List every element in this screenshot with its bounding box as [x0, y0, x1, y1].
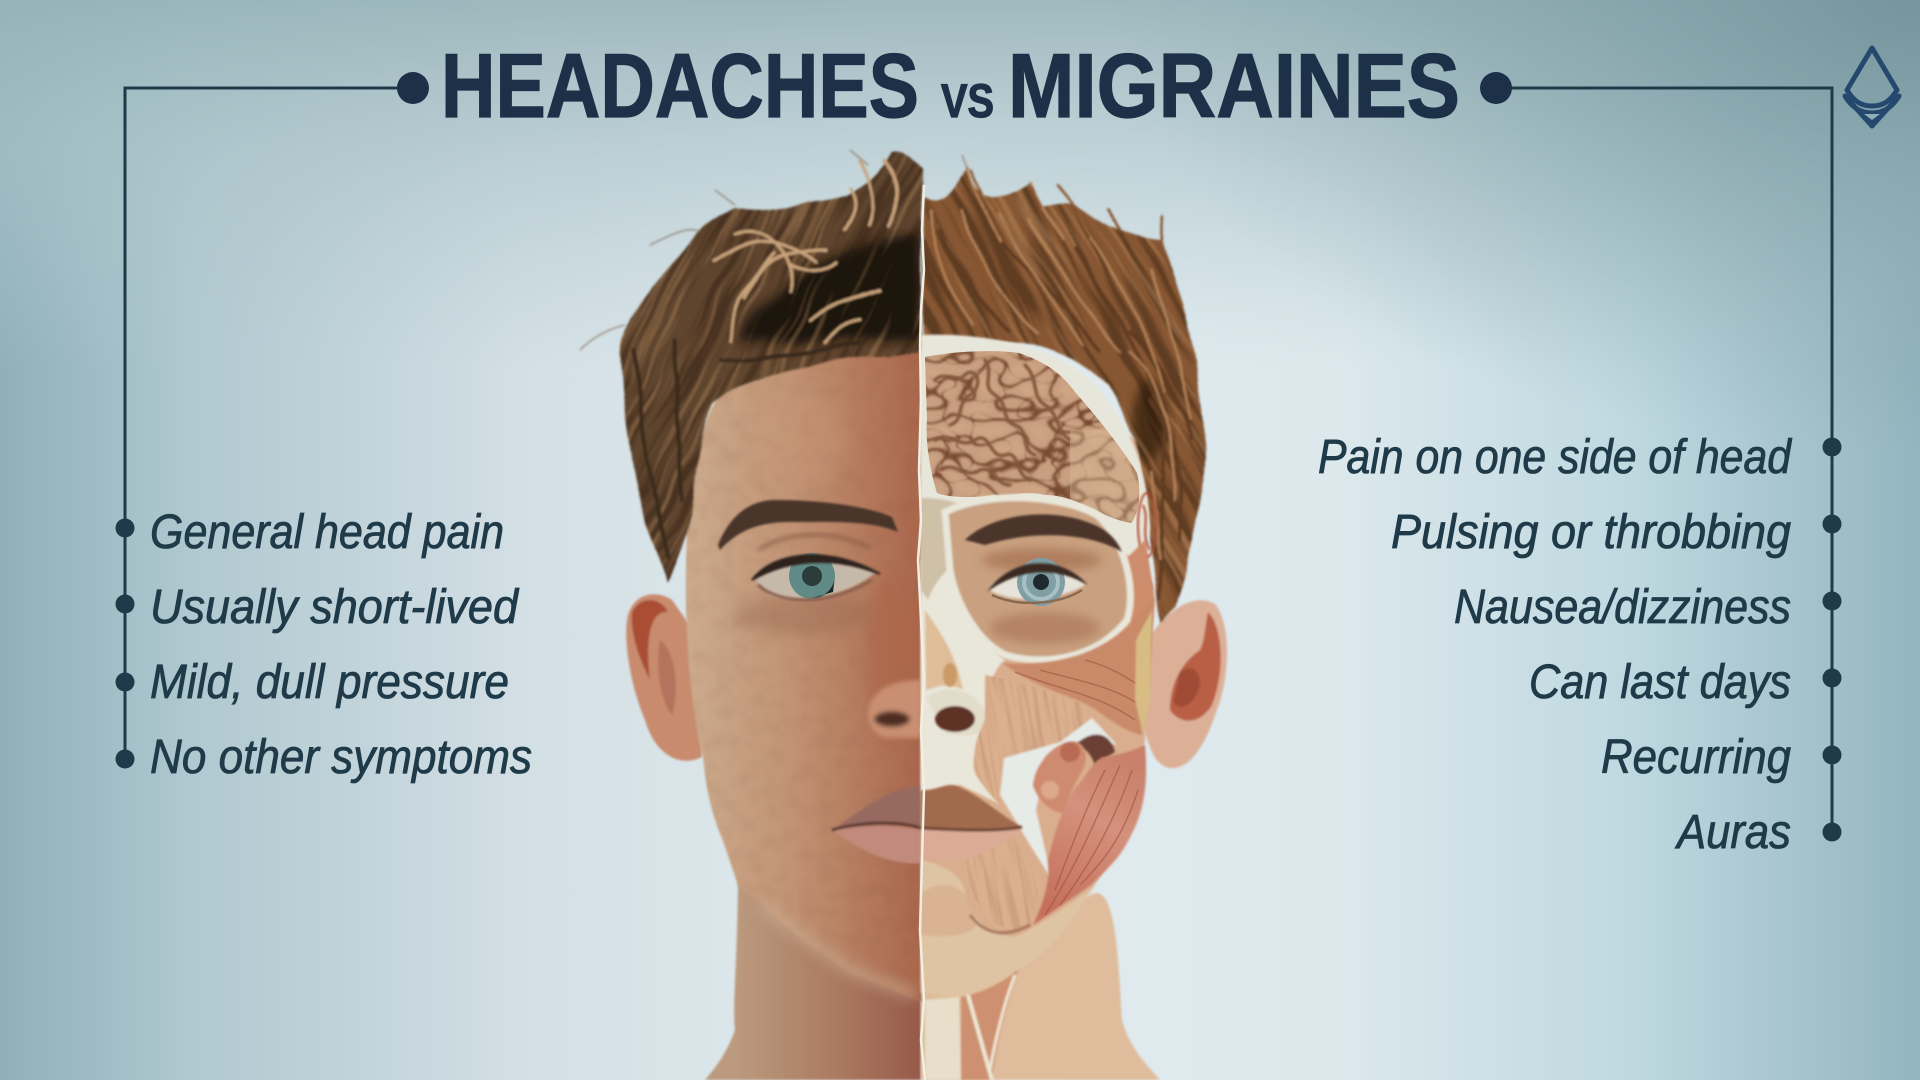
right title dot — [1480, 72, 1512, 104]
tan temple strip — [1125, 540, 1155, 660]
item: Nausea/dizziness: Nausea/dizziness — [1454, 581, 1791, 634]
yellow fat strip — [1135, 610, 1152, 735]
left eye — [752, 535, 880, 600]
item: Can last days: Can last days — [1529, 656, 1791, 709]
right head base — [921, 340, 1152, 997]
right hair — [920, 166, 1208, 624]
left face skin — [686, 345, 921, 1002]
item: No other symptoms: No other symptoms — [150, 731, 532, 784]
white fascia — [1000, 718, 1117, 880]
left hair — [618, 150, 925, 584]
stray hair wisps — [580, 150, 968, 350]
chin — [921, 860, 1095, 998]
left nose — [868, 680, 921, 738]
cheek fibres band — [1015, 660, 1145, 720]
right nostril — [926, 663, 986, 736]
right ear — [1140, 600, 1227, 768]
item: Mild, dull pressure: Mild, dull pressure — [150, 656, 509, 709]
item: Auras: Auras — [1674, 806, 1791, 859]
salivary gland — [1033, 741, 1086, 813]
skull band — [921, 335, 1150, 560]
right lips — [921, 785, 1022, 862]
vs word: VS — [941, 74, 994, 127]
upper cheek muscle — [1002, 598, 1153, 735]
left title dot — [397, 72, 429, 104]
brow bridge tissue — [921, 498, 975, 600]
left face mottling — [706, 436, 736, 789]
right frame line — [1496, 88, 1832, 832]
left face shading — [735, 390, 919, 995]
temporal vessel — [1138, 493, 1156, 590]
left hair strands — [635, 160, 899, 560]
illustration: half photographic, half anatomical face — [578, 148, 1228, 1080]
item: Pain on one side of head: Pain on one side of head — [1318, 431, 1792, 484]
right neck — [921, 893, 1160, 1080]
item: General head pain: General head pain — [150, 506, 504, 559]
item: Pulsing or throbbing: Pulsing or throbbing — [1391, 506, 1791, 559]
white nose and bridge — [921, 540, 1005, 805]
jaw muscle — [1033, 745, 1146, 925]
right eyebrow — [965, 514, 1122, 552]
list: migraines symptoms — [1318, 431, 1842, 859]
left ear — [626, 594, 702, 761]
brain — [925, 351, 1140, 523]
bullet dots right — [1822, 438, 1842, 842]
eye socket region — [945, 498, 1130, 660]
icon: logo gem — [1845, 48, 1899, 126]
cheek fibre texture — [966, 676, 1082, 929]
neck tendon — [925, 970, 1018, 1080]
cheek tissue — [965, 675, 1088, 930]
cream nasal patch — [925, 610, 963, 690]
right eye — [987, 558, 1088, 606]
stray hair lines — [572, 368, 1285, 372]
item: Recurring: Recurring — [1601, 731, 1791, 784]
title — [125, 36, 1832, 832]
headaches word: HEADACHES — [441, 36, 919, 137]
left neck — [705, 875, 921, 1080]
item: Usually short-lived: Usually short-lived — [150, 581, 519, 634]
migraines word: MIGRAINES — [1008, 36, 1460, 137]
left lips — [832, 786, 921, 863]
left eyebrow — [718, 500, 898, 550]
bullet dots left — [116, 518, 134, 768]
left frame line — [125, 88, 413, 760]
right eye socket shading — [982, 548, 1102, 644]
right hair strands — [930, 170, 1190, 600]
seam — [918, 185, 925, 1080]
list: headaches symptoms — [116, 506, 532, 784]
